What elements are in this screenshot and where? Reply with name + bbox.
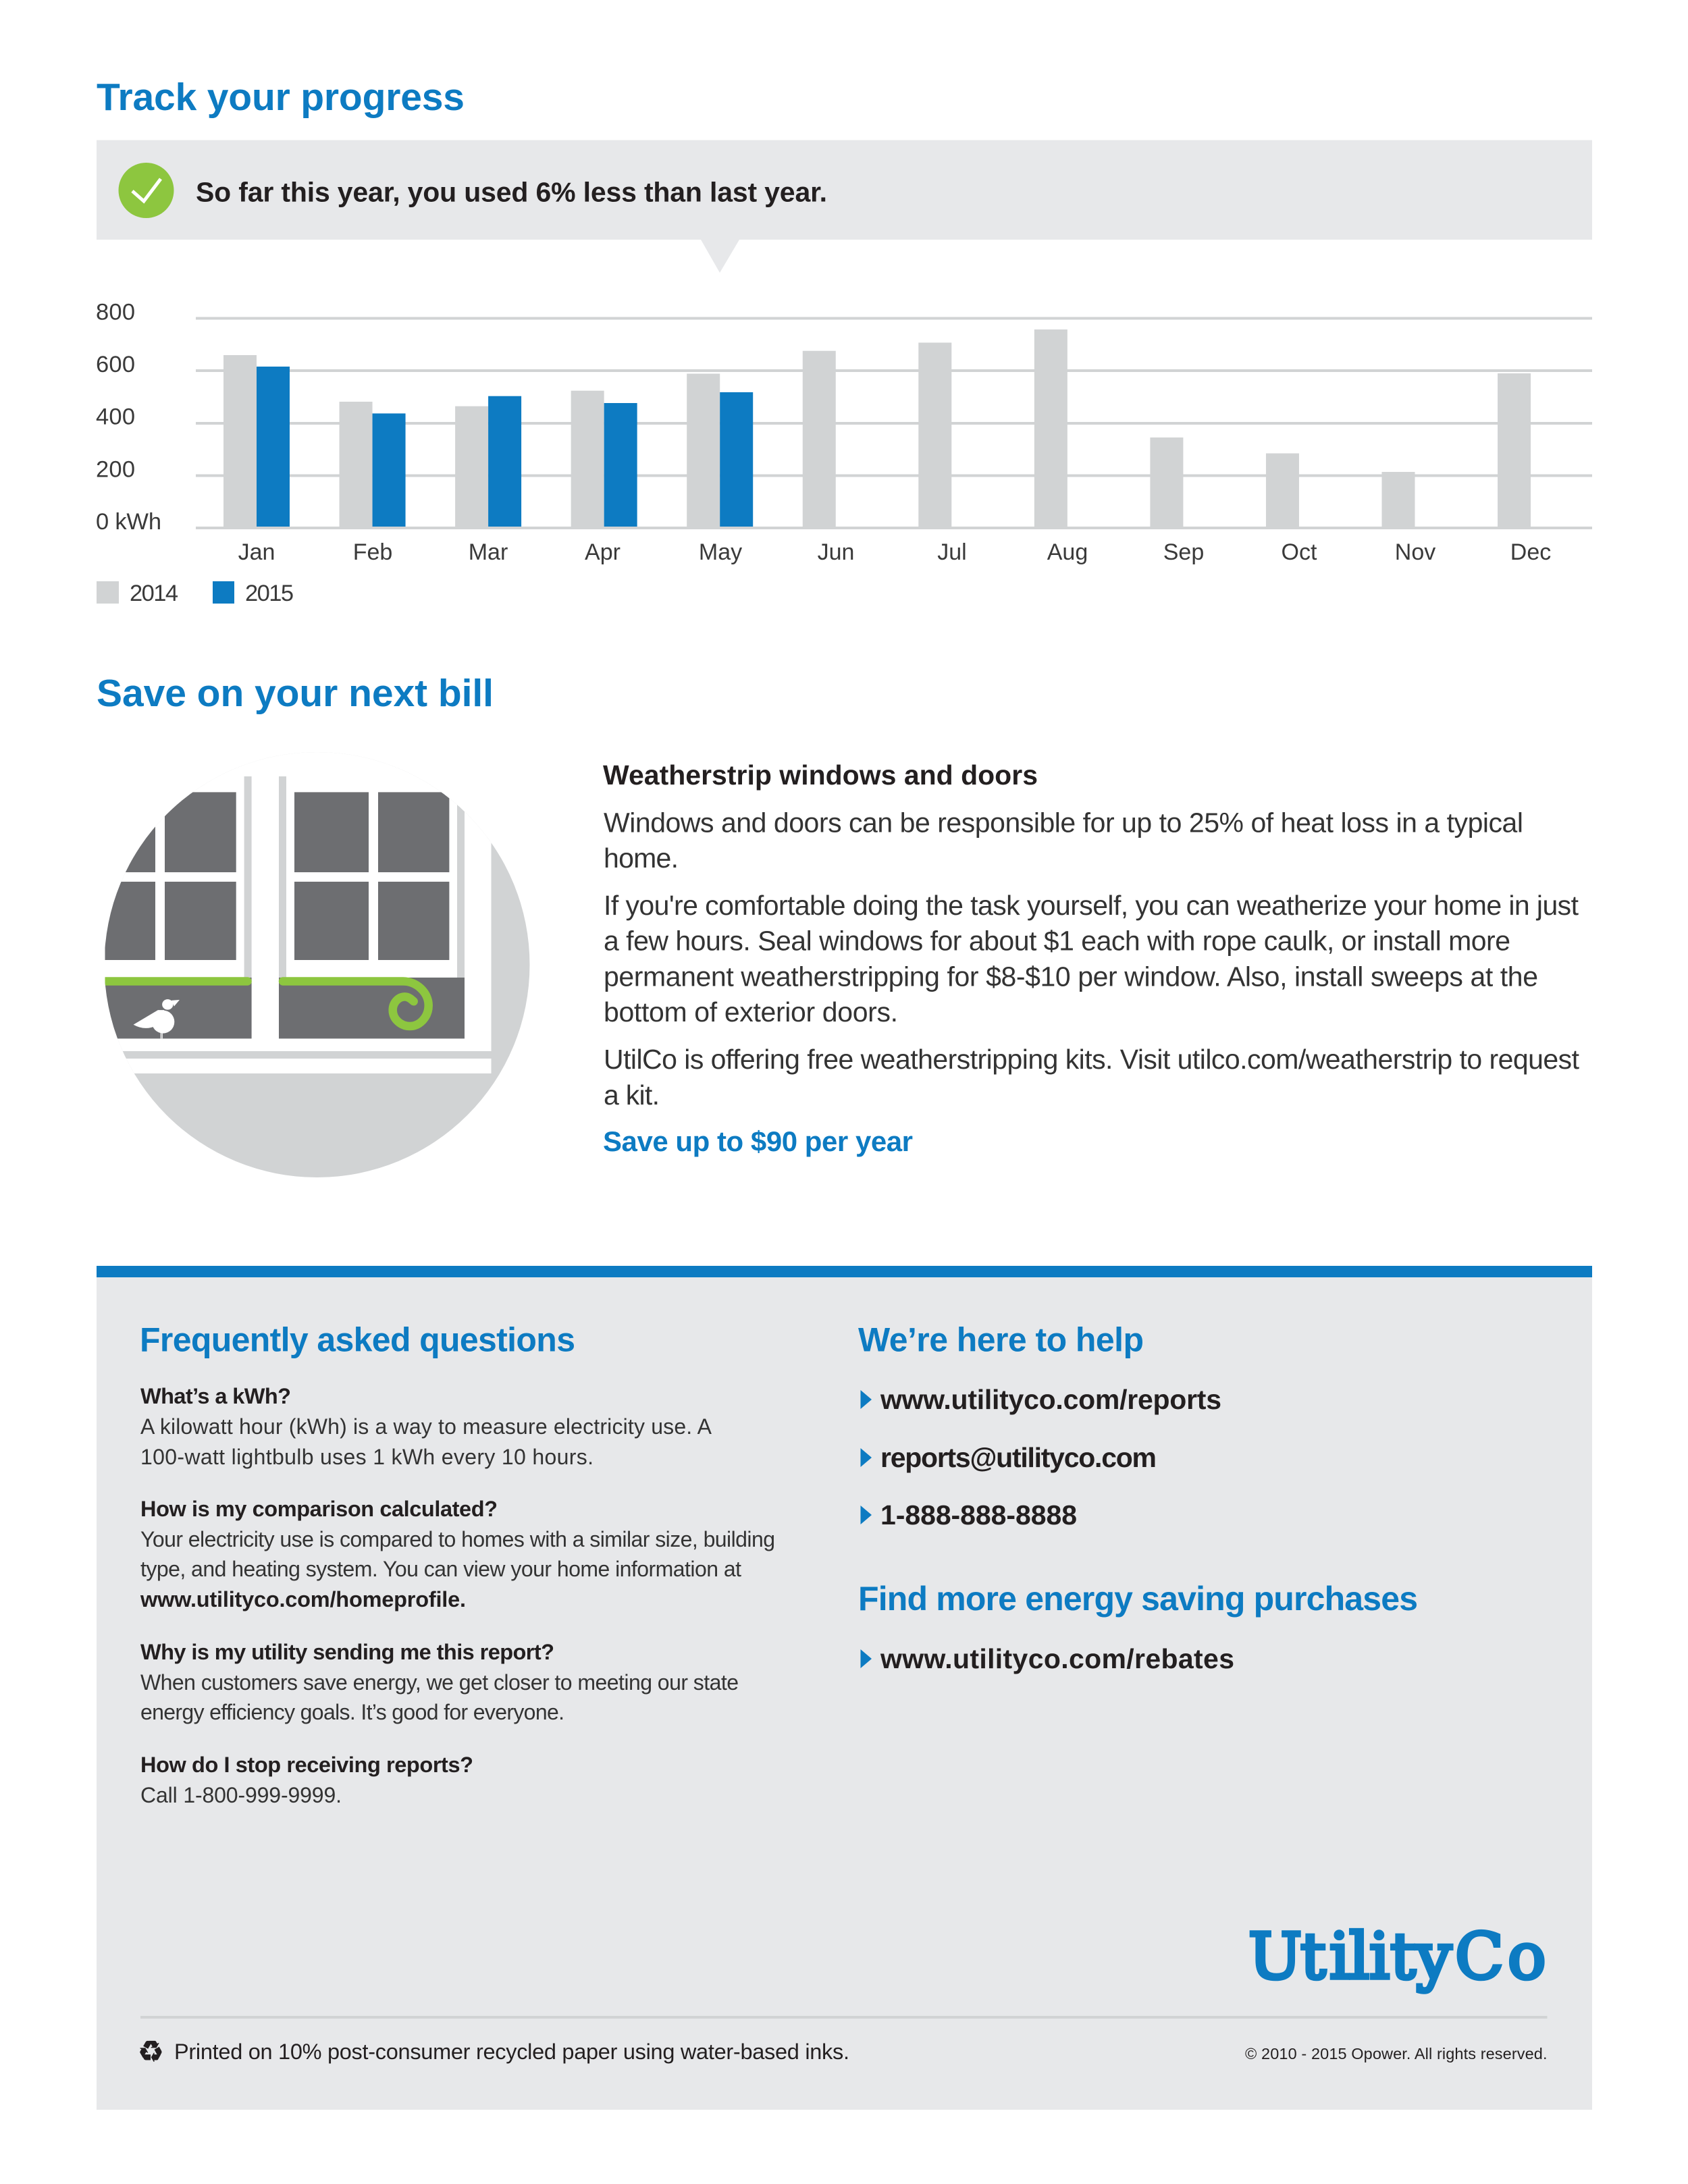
- FAQ: what's a kWh: 100-watt lightbulb uses 1 kWh every 10 hours.: [140, 1445, 594, 1469]
- copyright: © 2010 - 2015 Opower. All rights reserved.: [1245, 2045, 1548, 2062]
- y axis labels: [96, 300, 161, 535]
- FAQ: comparison: type, and heating system. You can view your home information at: [140, 1557, 741, 1581]
- chart legend: 2014: [130, 581, 178, 606]
- link: phone: 1-888-888-8888: [880, 1499, 1077, 1530]
- month labels: Sep: [1163, 539, 1204, 565]
- section: contact links: [858, 1321, 1418, 1674]
- month labels: Dec: [1510, 539, 1551, 565]
- tip paragraph 1: [604, 807, 1523, 874]
- FAQ: why report: When customers save energy, we get closer to meeting our state: [140, 1670, 739, 1695]
- 2014 bars: [223, 329, 1531, 527]
- chart gridlines: [196, 317, 1592, 529]
- section: frequently asked questions: [140, 1321, 775, 1807]
- tip paragraph 2: bottom of exterior doors.: [604, 996, 898, 1028]
- y axis labels: 0 kWh: [96, 509, 161, 535]
- tip paragraph 2: If you're comfortable doing the task yourself, you can weatherize your home in just: [604, 890, 1579, 921]
- FAQ: comparison: [140, 1497, 775, 1612]
- tip heading: Weatherstrip windows and doors: [603, 760, 1038, 791]
- icon: green weatherstrip with curl: [68, 982, 429, 1026]
- y axis labels: 800: [96, 300, 135, 325]
- FAQ: stop reports: How do I stop receiving reports?: [140, 1753, 473, 1777]
- FAQ: what's a kWh: A kilowatt hour (kWh) is a way to measure electricity use. A: [140, 1414, 712, 1439]
- month labels: Nov: [1395, 539, 1435, 565]
- month labels: Apr: [585, 539, 621, 565]
- FAQ: why report: energy efficiency goals. It’s good for everyone.: [140, 1700, 564, 1724]
- icon: recycling symbol: ♻: [138, 2035, 164, 2069]
- month labels: Mar: [469, 539, 508, 565]
- month labels: May: [699, 539, 742, 565]
- icon: green check mark: [119, 163, 174, 218]
- link: email: reports@utilityco.com: [880, 1442, 1157, 1473]
- recycled paper note: Printed on 10% post-consumer recycled paper using water-based inks.: [174, 2040, 849, 2064]
- tip paragraph 2: permanent weatherstripping for $8-$10 per window. Also, install sweeps at the: [604, 961, 1538, 992]
- FAQ: comparison: Your electricity use is compared to homes with a similar size, building: [140, 1527, 775, 1551]
- tip paragraph 1: home.: [604, 843, 679, 874]
- tip paragraph 2: [604, 890, 1579, 1028]
- illustration: window with weatherstripping: [105, 752, 529, 1177]
- panel: comparison callout: [97, 140, 1592, 273]
- logo: UtilityCo: UtilityCo: [1248, 1920, 1546, 1994]
- tip paragraph 3: a kit.: [604, 1080, 660, 1111]
- panel: footer: [97, 1266, 1592, 2110]
- icon: bird: [134, 999, 180, 1038]
- FAQ: stop reports: Call 1-800-999-9999.: [140, 1783, 342, 1807]
- month labels: Aug: [1047, 539, 1088, 565]
- heading: Track your progress: Track your progress: [97, 76, 465, 119]
- text block: weatherstrip tip: [603, 760, 1580, 1157]
- tip paragraph 3: [604, 1044, 1580, 1111]
- month labels: Oct: [1282, 539, 1317, 565]
- link: reports site: www.utilityco.com/reports: [880, 1384, 1221, 1415]
- tip paragraph 2: a few hours. Seal windows for about $1 each with rope caulk, or install more: [604, 925, 1510, 956]
- FAQ: stop reports: [140, 1753, 473, 1807]
- link: rebates: www.utilityco.com/rebates: [880, 1643, 1234, 1674]
- y axis labels: 200: [96, 456, 135, 482]
- savings line: Save up to $90 per year: [603, 1125, 913, 1157]
- chart legend: 2015: [245, 581, 294, 606]
- y axis labels: 400: [96, 404, 135, 429]
- tip paragraph 3: UtilCo is offering free weatherstripping kits. Visit utilco.com/weatherstrip to request: [604, 1044, 1580, 1075]
- heading: Save on your next bill: Save on your next bill: [97, 672, 494, 715]
- month labels: [238, 539, 1551, 565]
- contact heading: We’re here to help: [858, 1321, 1144, 1358]
- month labels: Jun: [818, 539, 854, 565]
- month labels: Jul: [937, 539, 967, 565]
- FAQ: what's a kWh: What’s a kWh?: [140, 1384, 291, 1408]
- 2015 bars: [257, 367, 753, 527]
- tip paragraph 1: Windows and doors can be responsible for up to 25% of heat loss in a typical: [604, 807, 1523, 838]
- FAQ: why report: Why is my utility sending me this report?: [140, 1640, 554, 1664]
- month labels: Jan: [238, 539, 275, 565]
- FAQ: comparison: How is my comparison calculated?: [140, 1497, 498, 1521]
- callout text: So far this year, you used 6% less than last year.: [196, 177, 827, 208]
- FAQ heading: Frequently asked questions: [140, 1321, 575, 1358]
- y axis labels: 600: [96, 352, 135, 377]
- month labels: Feb: [353, 539, 392, 565]
- FAQ: why report: [140, 1640, 739, 1724]
- FAQ: comparison: www.utilityco.com/homeprofile.: [140, 1587, 466, 1612]
- FAQ: what's a kWh: [140, 1384, 712, 1469]
- purchases heading: Find more energy saving purchases: [858, 1580, 1418, 1618]
- bar chart: monthly kWh: [96, 300, 1592, 565]
- chart legend: [97, 581, 294, 606]
